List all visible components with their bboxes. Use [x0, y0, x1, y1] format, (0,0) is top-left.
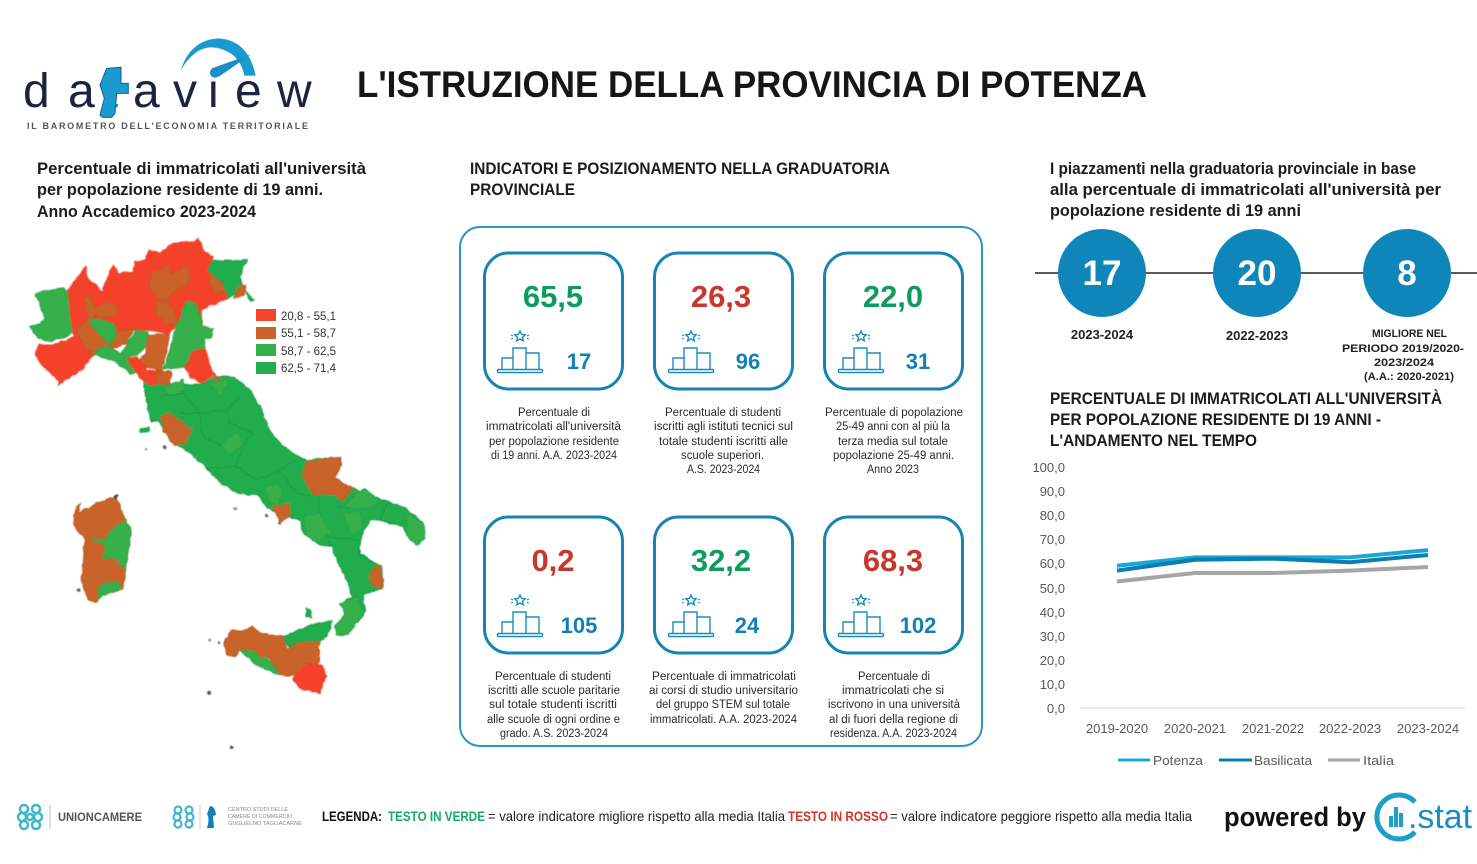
indicator card: istituti tecnici: 26,3	[691, 279, 751, 314]
heading: indicators	[470, 159, 890, 199]
heading: map	[37, 159, 367, 221]
placement best: PERIODO 2019/2020-	[1342, 343, 1464, 355]
choropleth map of Italy	[30, 238, 425, 749]
icon: C with bars	[1377, 795, 1415, 839]
y axis labels: 50,0	[1040, 581, 1065, 596]
heading: placements: I piazzamenti nella graduatoria provinciale in base	[1050, 159, 1416, 178]
heading: trend chart: L'ANDAMENTO NEL TEMPO	[1050, 431, 1257, 450]
y axis labels: 90,0	[1040, 484, 1065, 499]
y axis labels: 10,0	[1040, 677, 1065, 692]
heading: trend chart: PER POPOLAZIONE RESIDENTE DI 19 ANNI -	[1050, 410, 1381, 429]
caption: scuole paritarie	[487, 671, 620, 740]
panel: indicators	[460, 227, 982, 746]
x axis labels: 2019-2020	[1086, 721, 1148, 736]
caption: STEM: del gruppo STEM sul totale	[656, 699, 790, 711]
indicator card: STEM: 32,2	[691, 543, 751, 578]
line chart	[1032, 460, 1465, 768]
footer legend: LEGENDA:	[322, 808, 382, 824]
footer logo: Unioncamere	[18, 805, 142, 829]
caption: terza media: Anno 2023	[867, 464, 919, 476]
caption: istituti tecnici: A.S. 2023-2024	[687, 464, 761, 476]
indicator card: terza media	[824, 253, 962, 389]
indicator card: terza media: 31	[906, 349, 930, 374]
indicator card: immatricolati	[484, 253, 622, 389]
placement 2022-2023: 2022-2023	[1226, 328, 1288, 343]
heading: map: Percentuale di immatricolati all'università	[37, 159, 367, 178]
heading: indicators: PROVINCIALE	[470, 180, 575, 199]
heading: trend chart: PERCENTUALE DI IMMATRICOLATI ALL'UNIVERSITÀ	[1050, 389, 1442, 408]
placement 2022-2023: 20	[1238, 254, 1276, 293]
caption: istituti tecnici: totale studenti iscritti alle	[659, 436, 788, 448]
caption: terza media	[825, 407, 963, 476]
placement best: 8	[1397, 254, 1417, 293]
caption: terza media: Percentuale di popolazione	[825, 407, 963, 419]
footer legend	[322, 808, 1192, 824]
caption: STEM	[649, 671, 798, 726]
x axis labels: 2023-2024	[1397, 721, 1459, 736]
footer logo: Centro Studi Tagliacarne	[174, 805, 303, 829]
x axis labels: 2022-2023	[1319, 721, 1381, 736]
icon: knot small	[174, 806, 194, 828]
caption: terza media: terza media sul totale	[838, 436, 948, 448]
caption: fuori regione: Percentuale di	[858, 671, 930, 683]
caption: immatricolati: per popolazione residente	[489, 436, 619, 448]
footer legend: TESTO IN ROSSO	[788, 808, 888, 824]
title: L'ISTRUZIONE DELLA PROVINCIA DI POTENZA	[357, 64, 1147, 105]
map: south and islands	[73, 495, 383, 749]
logo wordmark: dat aview	[23, 65, 312, 118]
placement best	[1342, 229, 1464, 383]
caption: scuole paritarie: sul totale studenti iscritti	[489, 699, 617, 711]
caption: istituti tecnici: scuole superiori.	[681, 450, 764, 462]
indicator card: fuori regione: 102	[900, 613, 936, 638]
map legend: 62,5 - 71,4	[281, 363, 337, 375]
placement 2023-2024: 2023-2024	[1071, 327, 1134, 342]
map: peninsula	[140, 377, 425, 580]
footer logo: Unioncamere: UNIONCAMERE	[58, 810, 142, 824]
y axis labels: 40,0	[1040, 605, 1065, 620]
indicator card: immatricolati: 17	[567, 349, 591, 374]
heading: placements: alla percentuale di immatricolati all'università per	[1050, 180, 1441, 199]
footer logo: Centro Studi Tagliacarne: CENTRO STUDI DELLE	[228, 807, 289, 813]
caption: immatricolati: immatricolati all'università	[486, 421, 622, 433]
series Basilicata	[1117, 555, 1428, 571]
indicator card: terza media: 22,0	[863, 279, 923, 314]
heading: placements	[1050, 159, 1441, 220]
caption: immatricolati: Percentuale di	[518, 407, 590, 419]
series Italia	[1117, 567, 1428, 582]
logo: C.stat	[1377, 795, 1473, 839]
y axis labels: 100,0	[1032, 460, 1065, 475]
indicator card: STEM	[654, 517, 792, 653]
heading: map: Anno Accademico 2023-2024	[37, 202, 257, 221]
placement 2023-2024: 17	[1083, 254, 1121, 293]
heading: placements: popolazione residente di 19 anni	[1050, 201, 1301, 220]
caption: immatricolati	[486, 407, 622, 462]
x axis labels: 2020-2021	[1164, 721, 1226, 736]
footer legend: = valore indicatore peggiore rispetto alla media Italia	[890, 808, 1192, 824]
caption: fuori regione: al di fuori della regione di	[829, 714, 958, 726]
footer legend: TESTO IN VERDE	[388, 808, 485, 824]
indicator card: STEM: 24	[735, 613, 760, 638]
chart legend: Italia	[1363, 753, 1395, 768]
indicator card: scuole paritarie	[484, 517, 622, 653]
logo: Dataview	[23, 38, 312, 131]
placement 2023-2024	[1058, 229, 1146, 342]
caption: immatricolati: di 19 anni. A.A. 2023-2024	[491, 450, 618, 462]
y axis labels: 0,0	[1047, 701, 1065, 716]
y axis labels	[1032, 460, 1065, 716]
heading: map: per popolazione residente di 19 anni.	[37, 180, 323, 199]
indicator card: fuori regione	[824, 517, 962, 653]
placement 2022-2023	[1213, 229, 1301, 343]
caption: fuori regione: iscrivono in una università	[828, 699, 961, 711]
logo: C.stat: .stat	[1408, 798, 1473, 836]
chart legend: Basilicata	[1254, 753, 1313, 768]
placement best: MIGLIORE NEL	[1372, 328, 1447, 340]
map legend: 20,8 - 55,1	[281, 311, 336, 323]
caption: scuole paritarie: alle scuole di ogni ordine e	[487, 714, 620, 726]
caption: terza media: popolazione 25-49 anni.	[833, 450, 954, 462]
caption: scuole paritarie: grado. A.S. 2023-2024	[500, 728, 609, 740]
y axis labels: 20,0	[1040, 653, 1065, 668]
indicator card: istituti tecnici: 96	[736, 349, 760, 374]
chart legend	[1118, 753, 1395, 768]
y axis labels: 30,0	[1040, 629, 1065, 644]
x axis labels	[1086, 721, 1459, 736]
map legend: 58,7 - 62,5	[281, 346, 336, 358]
caption: istituti tecnici: Percentuale di studenti	[665, 407, 781, 419]
placements timeline	[1035, 229, 1477, 383]
placement best: (A.A.: 2020-2021)	[1364, 371, 1454, 383]
icon: knot	[18, 805, 42, 829]
heading: indicators: INDICATORI E POSIZIONAMENTO NELLA GRADUATORIA	[470, 159, 890, 178]
caption: scuole paritarie: iscritti alle scuole paritarie	[488, 685, 620, 697]
map: northern regions	[30, 238, 255, 385]
caption: fuori regione: residenza. A.A. 2023-2024	[830, 728, 958, 740]
map legend	[256, 309, 337, 375]
caption: STEM: ai corsi di studio universitario	[649, 685, 798, 697]
y axis labels: 60,0	[1040, 556, 1065, 571]
indicator card: istituti tecnici	[654, 253, 792, 389]
caption: STEM: immatricolati. A.A. 2023-2024	[650, 714, 798, 726]
map: regions	[30, 238, 425, 749]
footer legend: = valore indicatore migliore rispetto alla media Italia	[488, 808, 785, 824]
caption: STEM: Percentuale di immatricolati	[652, 671, 796, 683]
placement best: 2023/2024	[1374, 357, 1435, 369]
y axis labels: 80,0	[1040, 508, 1065, 523]
icon: gauge and stylised t	[100, 38, 256, 117]
series Potenza	[1117, 550, 1428, 566]
indicator card: fuori regione: 68,3	[863, 543, 923, 578]
indicator card: scuole paritarie: 105	[561, 613, 597, 638]
caption: istituti tecnici	[654, 407, 793, 476]
map legend: 55,1 - 58,7	[281, 328, 336, 340]
chart legend: Potenza	[1153, 753, 1204, 768]
footer logo: Centro Studi Tagliacarne: GUGLIELMO TAGLIACARNE	[228, 821, 303, 827]
powered by: powered by	[1224, 802, 1366, 832]
caption: terza media: 25-49 anni con al più la	[836, 421, 951, 433]
indicator card: immatricolati: 65,5	[523, 279, 583, 314]
caption: fuori regione: immatricolati che si	[842, 685, 944, 697]
logo tagline: IL BAROMETRO DELL'ECONOMIA TERRITORIALE	[27, 121, 308, 131]
caption: scuole paritarie: Percentuale di studenti	[495, 671, 611, 683]
caption: fuori regione	[828, 671, 961, 740]
y axis labels: 70,0	[1040, 532, 1065, 547]
footer logo: Centro Studi Tagliacarne: CAMERE DI COMMERCIO	[228, 814, 292, 820]
caption: istituti tecnici: iscritti agli istituti tecnici sul	[654, 421, 793, 433]
indicator card: scuole paritarie: 0,2	[531, 543, 575, 578]
heading: trend chart	[1050, 389, 1442, 450]
x axis labels: 2021-2022	[1242, 721, 1304, 736]
